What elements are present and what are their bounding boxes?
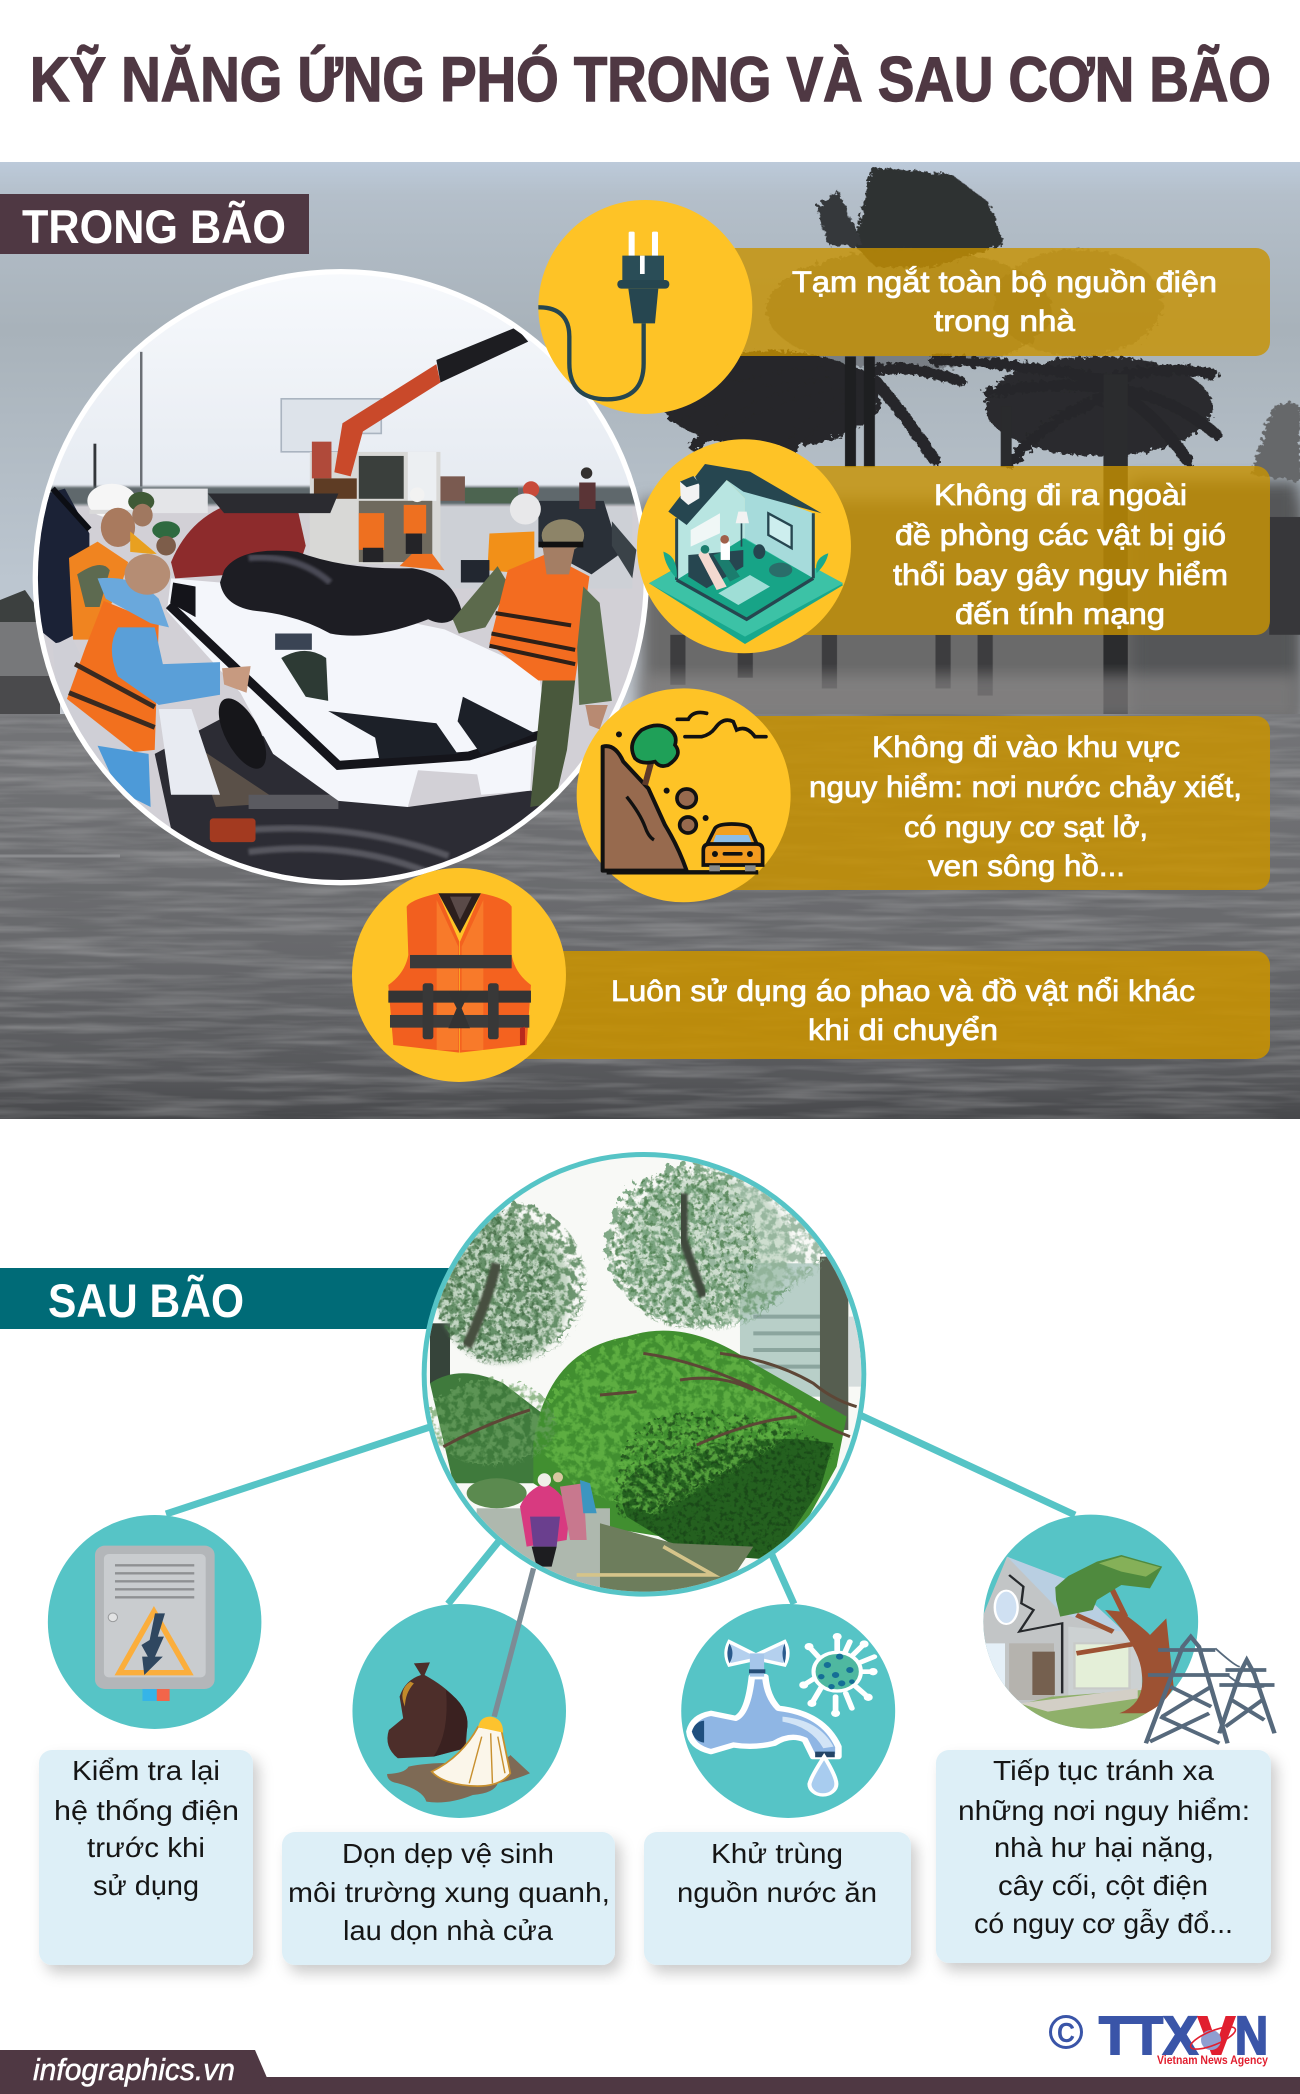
person left front bbox=[67, 601, 159, 752]
icon: trash bag and mop bbox=[352, 1568, 566, 1818]
heading: sau bao: SAU BÃO bbox=[48, 1274, 244, 1327]
photo: fallen trees after storm bbox=[422, 1152, 866, 1597]
panel: tip life jacket: Luôn sử dụng áo phao và đồ vật nổi khác bbox=[611, 975, 1195, 1008]
card: check electric system: hệ thống điện bbox=[54, 1795, 239, 1826]
panel: tip cut off electricity: trong nhà bbox=[934, 305, 1075, 338]
card: check electric system: Kiểm tra lại bbox=[72, 1755, 220, 1786]
panel: tip stay indoors: đến tính mạng bbox=[955, 598, 1165, 631]
card: avoid dangerous places: cây cối, cột điện bbox=[998, 1870, 1208, 1901]
icon: life jacket bbox=[352, 868, 566, 1082]
logo: TTXVN copyright: C bbox=[1057, 2017, 1075, 2048]
card: avoid dangerous places: có nguy cơ gẫy đổ... bbox=[974, 1908, 1233, 1939]
panel: tip avoid dangerous areas: Không đi vào khu vực bbox=[872, 731, 1180, 764]
logo: TTXVN copyright: Vietnam News Agency bbox=[1157, 2053, 1268, 2067]
logo: TTXVN copyright: TTX bbox=[1099, 2006, 1198, 2066]
panel: tip stay indoors: thổi bay gây nguy hiểm bbox=[893, 559, 1228, 592]
panel: tip cut off electricity: Tạm ngắt toàn bộ nguồn điện bbox=[792, 266, 1217, 299]
logo: TTXVN copyright bbox=[1050, 2006, 1268, 2067]
card: clean the environment: lau dọn nhà cửa bbox=[343, 1915, 553, 1946]
heading: trong bao: TRONG BÃO bbox=[22, 200, 286, 253]
footer bar: infographics.vn bbox=[33, 2052, 235, 2087]
card: check electric system: sử dụng bbox=[93, 1870, 199, 1901]
person right bbox=[453, 566, 510, 634]
card: check electric system: trước khi bbox=[87, 1832, 205, 1863]
card: avoid dangerous places: những nơi nguy hiểm: bbox=[958, 1795, 1250, 1826]
card: clean the environment: môi trường xung quanh, bbox=[288, 1877, 610, 1908]
icon: family in house bbox=[637, 439, 851, 653]
icon: landslide and car bbox=[577, 688, 791, 902]
icon: plug in yellow circle bbox=[538, 200, 752, 414]
icon: water tap and virus bbox=[681, 1604, 895, 1818]
heading: sau bao bbox=[0, 1268, 450, 1329]
panel: tip stay indoors bbox=[744, 466, 1270, 635]
panel: tip stay indoors: đề phòng các vật bị gió bbox=[895, 519, 1226, 552]
photo: rescue workers with jet ski bbox=[20, 260, 673, 893]
panel: storm background photo bbox=[0, 162, 1300, 1119]
footer bar bbox=[0, 2050, 1300, 2094]
panel: tip avoid dangerous areas: ven sông hồ... bbox=[928, 850, 1125, 883]
icon: damaged house, tree and pylons bbox=[978, 1515, 1274, 1743]
card: avoid dangerous places: Tiếp tục tránh xa bbox=[993, 1755, 1214, 1786]
panel: tip life jacket: khi di chuyển bbox=[808, 1014, 998, 1047]
panel: tip stay indoors: Không đi ra ngoài bbox=[934, 479, 1187, 512]
panel: tip avoid dangerous areas: có nguy cơ sạt lở, bbox=[904, 811, 1148, 844]
icon: electric box bbox=[48, 1515, 261, 1729]
card: avoid dangerous places bbox=[936, 1750, 1271, 1963]
card: check electric system bbox=[39, 1750, 253, 1965]
logo: TTXVN copyright: V bbox=[1198, 2006, 1235, 2066]
panel: tip life jacket bbox=[459, 951, 1270, 1059]
panel: tip avoid dangerous areas: nguy hiểm: nơi nước chảy xiết, bbox=[809, 771, 1242, 804]
connector lines bbox=[166, 1415, 1075, 1604]
person left back bbox=[69, 542, 128, 640]
card: clean the environment: Dọn dẹp vệ sinh bbox=[342, 1838, 554, 1869]
panel: tip avoid dangerous areas bbox=[684, 716, 1270, 890]
panel: tip cut off electricity bbox=[645, 248, 1270, 356]
card: clean the environment bbox=[282, 1832, 615, 1965]
palms bbox=[640, 167, 1300, 720]
card: avoid dangerous places: nhà hư hại nặng, bbox=[994, 1832, 1214, 1863]
card: disinfect drinking water bbox=[644, 1832, 911, 1965]
jet ski bbox=[167, 578, 549, 807]
dark water bbox=[155, 717, 563, 885]
logo: TTXVN copyright: N bbox=[1235, 2006, 1268, 2066]
card: disinfect drinking water: Khử trùng bbox=[711, 1838, 843, 1869]
card: disinfect drinking water: nguồn nước ăn bbox=[677, 1877, 877, 1908]
